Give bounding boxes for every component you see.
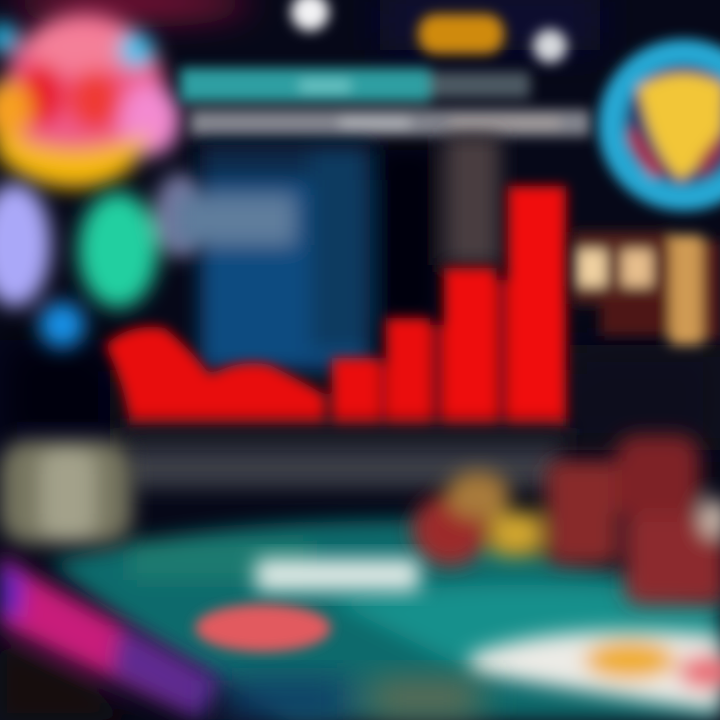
icon: purple and green balloons: [0, 173, 206, 348]
icon: party emblem: [0, 12, 180, 188]
icon: coin stack left: [0, 440, 132, 544]
red token: [195, 604, 331, 652]
card bottom right: [470, 630, 720, 712]
bar 1: [332, 358, 380, 426]
panel: blue data panel: [175, 135, 500, 370]
chart body: [105, 327, 325, 425]
title band: [180, 68, 590, 136]
bar 3: [444, 268, 496, 426]
background glow: [0, 0, 720, 450]
panel: teal table: [50, 520, 720, 720]
small bars: right side: [572, 232, 720, 345]
top lights: [291, 0, 567, 63]
bar 4: [508, 186, 566, 426]
white card: [255, 558, 420, 592]
bar gaps: [378, 365, 388, 425]
icon: trophy badge: [598, 39, 720, 211]
chart baseline: [120, 425, 570, 488]
bar 2: [386, 318, 430, 426]
bar chart: red bars: [105, 186, 566, 426]
icon: red chip stacks: [412, 435, 720, 605]
table edge: magenta strip: [0, 555, 225, 720]
table edge: blue corner: [220, 680, 480, 720]
